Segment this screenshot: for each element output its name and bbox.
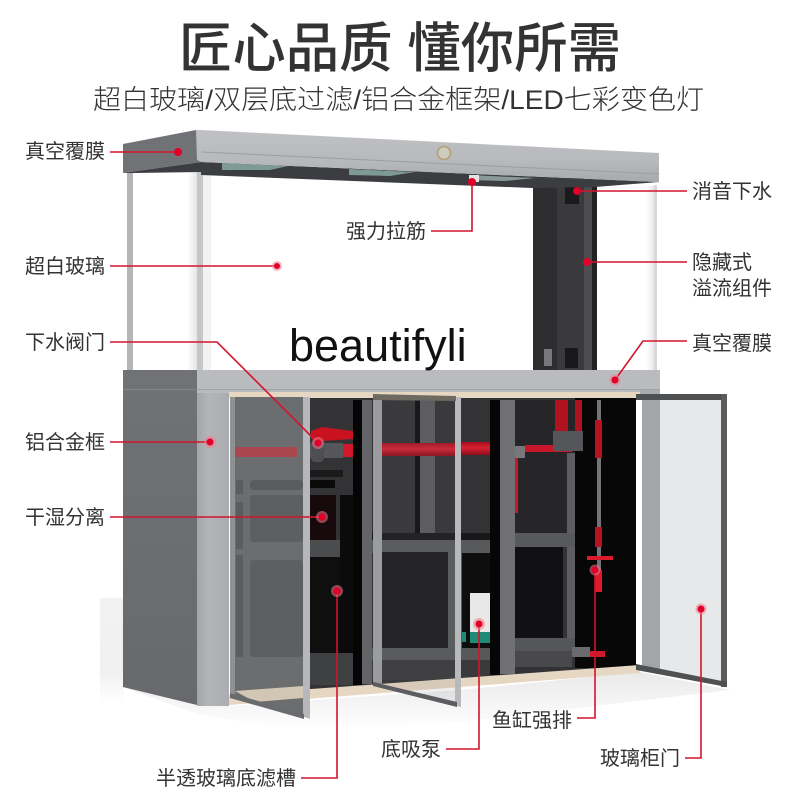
centre door — [373, 394, 461, 707]
callout: 底吸泵: 底吸泵 — [381, 738, 441, 761]
callout: 玻璃柜门 — [600, 604, 706, 770]
callout: 超白玻璃 — [25, 255, 282, 278]
left door — [230, 397, 310, 719]
callout: 消音下水 — [573, 180, 772, 203]
subtitle: 超白玻璃/双层底过滤/铝合金框架/LED七彩变色灯 — [93, 85, 704, 115]
glass tank — [127, 170, 657, 370]
callout: 真空覆膜 right — [610, 332, 772, 386]
callout: 隐藏式溢流组件: 溢流组件 — [692, 277, 772, 300]
callout: 玻璃柜门: 玻璃柜门 — [600, 747, 680, 770]
callout: 隐藏式溢流组件 — [583, 251, 772, 300]
overflow column — [533, 178, 597, 370]
callout: 强力拉筋: 强力拉筋 — [346, 220, 426, 243]
logo badge — [438, 146, 450, 160]
pump — [462, 593, 490, 643]
callout: 真空覆膜 top — [25, 140, 182, 163]
hood — [123, 130, 659, 182]
callout: 下水阀门 — [25, 331, 324, 449]
callout: 鱼缸强排: 鱼缸强排 — [492, 709, 572, 732]
hood underside — [123, 162, 659, 188]
callout: 真空覆膜 right: 真空覆膜 — [692, 332, 772, 355]
callout: 下水阀门: 下水阀门 — [25, 331, 105, 354]
cabinet bottom rail — [229, 665, 640, 705]
callout: 真空覆膜 top: 真空覆膜 — [25, 140, 105, 163]
callout: 半透玻璃底滤槽 — [156, 585, 343, 790]
callout: 超白玻璃: 超白玻璃 — [25, 255, 105, 278]
callout: 消音下水: 消音下水 — [692, 180, 772, 203]
callout: 铝合金框 — [25, 431, 216, 454]
watermark text: beautifyli — [289, 320, 467, 371]
cabinet interior — [231, 398, 636, 696]
callout: 干湿分离: 干湿分离 — [25, 506, 105, 529]
cabinet base — [123, 370, 660, 706]
red pipes — [343, 400, 613, 657]
aquarium illustration — [100, 130, 730, 730]
floor shadow — [100, 598, 730, 730]
callout: 鱼缸强排 — [492, 564, 600, 732]
callout: 铝合金框: 铝合金框 — [25, 431, 105, 454]
sump stand — [310, 470, 575, 685]
title: 匠心品质 懂你所需 — [179, 19, 621, 79]
callout: 隐藏式溢流组件: 隐藏式 — [692, 251, 752, 274]
callout: 干湿分离 — [25, 506, 328, 529]
ball valve — [310, 427, 353, 462]
callout: 半透玻璃底滤槽: 半透玻璃底滤槽 — [156, 767, 296, 790]
callout: 底吸泵 — [381, 618, 485, 761]
callout: 强力拉筋 — [346, 178, 476, 243]
right door — [636, 394, 727, 687]
